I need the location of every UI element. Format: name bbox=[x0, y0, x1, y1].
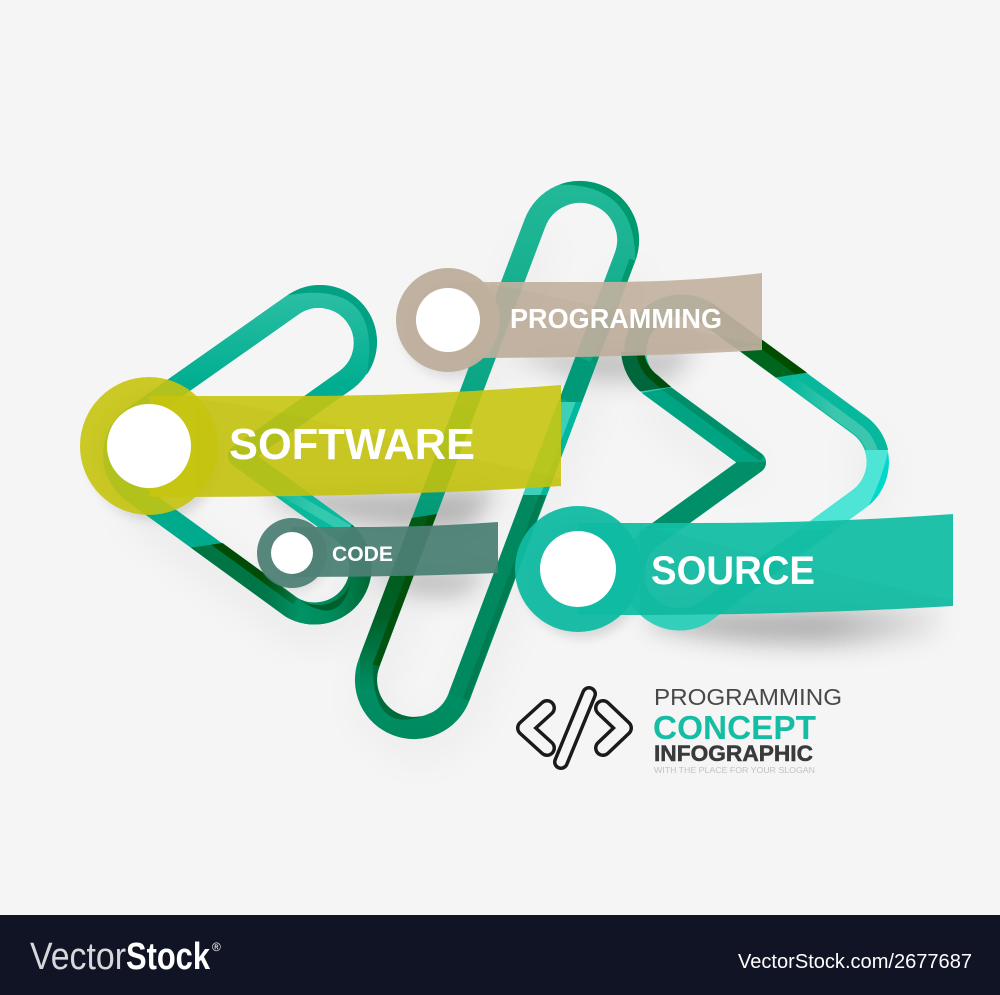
source circle bbox=[515, 506, 641, 632]
soft shadows under the bands and lines bbox=[89, 239, 945, 744]
logo line: slogan: WITH THE PLACE FOR YOUR SLOGAN bbox=[654, 766, 815, 775]
panel: software label bbox=[80, 377, 561, 515]
code circle bbox=[257, 518, 327, 588]
programming band bbox=[448, 273, 762, 358]
programming circle bbox=[396, 268, 500, 372]
logo line: infographic: INFOGRAPHIC bbox=[654, 741, 813, 766]
footer brand: Vector bbox=[30, 936, 126, 978]
software text: SOFTWARE bbox=[229, 420, 475, 469]
source band bbox=[578, 514, 953, 615]
icon: code brackets logo bbox=[525, 694, 624, 762]
code band bbox=[292, 522, 498, 577]
panel: code label bbox=[257, 518, 498, 588]
logo line: concept: CONCEPT bbox=[653, 709, 816, 746]
programming white dot bbox=[416, 288, 480, 352]
footer image id: VectorStock.com/2677687 bbox=[738, 951, 972, 973]
slash line bbox=[366, 181, 639, 728]
right chevron line bbox=[632, 306, 889, 619]
software white dot bbox=[107, 404, 191, 488]
programming text: PROGRAMMING bbox=[510, 303, 722, 334]
source text: SOURCE bbox=[651, 549, 815, 593]
footer bar bbox=[0, 915, 1000, 995]
code white dot bbox=[271, 532, 313, 574]
logo line: programming: PROGRAMMING bbox=[654, 684, 842, 710]
left chevron line bbox=[114, 285, 377, 613]
code text: CODE bbox=[332, 543, 393, 566]
panel: programming label bbox=[396, 268, 762, 372]
software band bbox=[149, 385, 561, 497]
footer brand bold: Stock bbox=[126, 936, 211, 978]
software circle bbox=[80, 377, 218, 515]
footer registered mark: ® bbox=[212, 940, 221, 954]
logo text block bbox=[653, 684, 842, 775]
panel: source label bbox=[515, 506, 953, 632]
source white dot bbox=[540, 531, 616, 607]
